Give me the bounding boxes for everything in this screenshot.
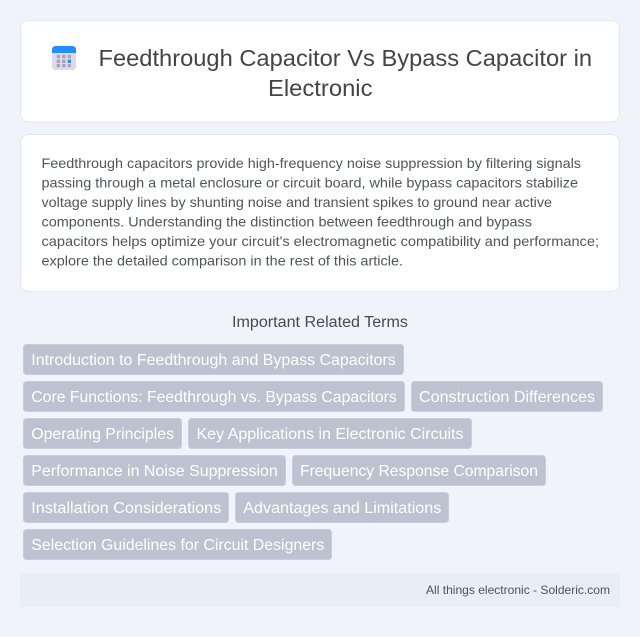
tag <box>24 382 404 412</box>
panel: summary card <box>20 134 620 292</box>
icon: calendar <box>52 46 76 70</box>
tag: Operating Principles <box>31 426 174 443</box>
tag: Frequency Response Comparison <box>300 463 538 480</box>
tag: Key Applications in Electronic Circuits <box>196 426 464 443</box>
tag <box>236 492 448 522</box>
tag: Core Functions: Feedthrough vs. Bypass Capacitors <box>31 389 397 406</box>
footer bar: All things electronic - Solderic.com <box>426 583 610 597</box>
text block: summary paragraph: voltage supply lines by shunting noise and transient spikes to ground near active <box>42 194 552 210</box>
panel: related term tags <box>24 344 602 560</box>
tag <box>412 382 602 412</box>
text block: summary paragraph <box>42 155 599 268</box>
tag <box>188 418 472 448</box>
heading: important related terms: Important Related Terms <box>232 314 408 331</box>
text block: summary paragraph: explore the detailed comparison in the rest of this article. <box>42 252 403 268</box>
tag <box>24 456 286 486</box>
title: Electronic <box>268 75 373 101</box>
text block: summary paragraph: components. Understanding the distinction between feedthrough and bypass <box>42 214 532 230</box>
text block: summary paragraph: capacitors helps optimize your circuit's electromagnetic compatibility and performance; <box>42 233 599 249</box>
tag: Advantages and Limitations <box>243 500 442 517</box>
text block: summary paragraph: passing through a metal enclosure or circuit board, while bypass capacitors stabilize <box>42 174 578 190</box>
tag: Selection Guidelines for Circuit Designers <box>31 537 325 554</box>
tag <box>24 418 182 448</box>
panel: title card <box>20 20 620 122</box>
tag: Installation Considerations <box>31 500 222 517</box>
tag <box>24 530 332 560</box>
title <box>98 45 592 101</box>
tag <box>24 492 228 522</box>
text block: summary paragraph: Feedthrough capacitors provide high-frequency noise suppression by filtering signals <box>42 155 581 171</box>
tag: Construction Differences <box>419 389 595 406</box>
footer bar <box>20 573 620 607</box>
title: Feedthrough Capacitor Vs Bypass Capacitor in <box>98 45 592 71</box>
tag <box>24 344 404 374</box>
tag: Introduction to Feedthrough and Bypass Capacitors <box>31 352 396 369</box>
tag <box>292 456 546 486</box>
tag: Performance in Noise Suppression <box>31 463 278 480</box>
